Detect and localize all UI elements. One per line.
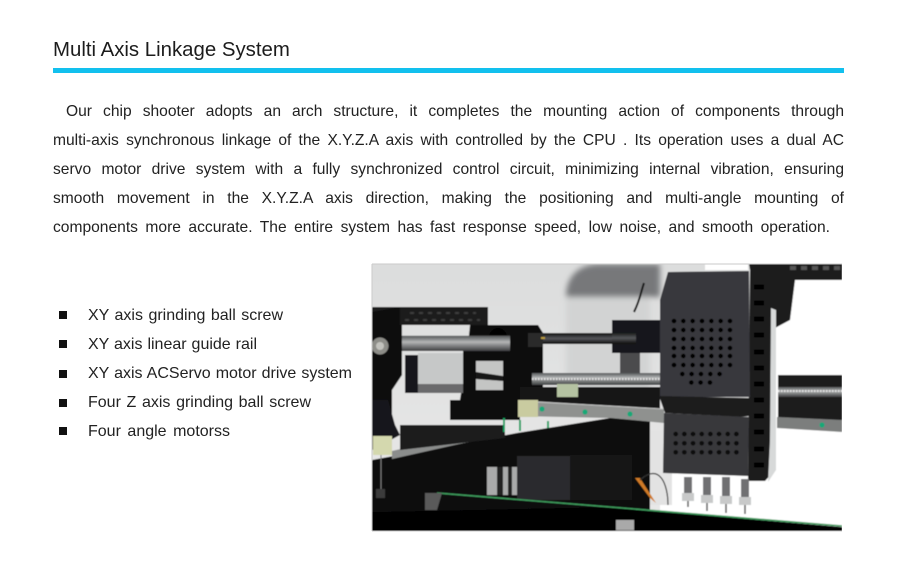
lower right machine window (660, 470, 672, 506)
lower green strip (372, 507, 842, 531)
feature list: XY axis ACServo motor drive system (88, 365, 352, 382)
black rod and end block (543, 333, 633, 344)
intro paragraph: components more accurate. The entire system has fast response speed, low noise, and smooth operation. (53, 219, 830, 236)
rear drag chain (372, 307, 488, 325)
intro paragraph: servo motor drive system with a fully synchronized control circuit, minimizing internal vibration, ensuring (53, 161, 844, 178)
linear guide rail (538, 400, 665, 424)
upper ball screw (402, 336, 510, 351)
intro paragraph: Our chip shooter adopts an arch structure, it completes the mounting action of components through (66, 103, 844, 120)
lower black frame (372, 417, 651, 513)
feature list (59, 307, 352, 440)
intro paragraph (53, 103, 844, 236)
rail green markers (539, 406, 825, 428)
black bracket (460, 325, 543, 400)
placement head (659, 271, 785, 514)
servo motor (405, 355, 418, 393)
intro paragraph: smooth movement in the X.Y.Z.A axis direction, making the positioning and multi-angle mounting of (53, 190, 844, 207)
feature list: Four angle motorss (88, 423, 230, 440)
machine photo: multi-axis gantry and placement head (372, 264, 842, 532)
intro paragraph: multi-axis synchronous linkage of the X.Y.Z.A axis with controlled by the CPU . Its operation uses a dual AC (53, 132, 844, 149)
photo background (372, 264, 751, 511)
feature list: XY axis grinding ball screw (88, 307, 283, 324)
clear rail blocks (518, 400, 538, 417)
bullet item: XY axis grinding ball screw (59, 307, 284, 324)
nozzles (682, 477, 751, 514)
lower ball screw (532, 373, 662, 385)
bullet item: Four angle motorss (59, 423, 230, 440)
title underline bar (53, 68, 844, 73)
bullet item: XY axis ACServo motor drive system (59, 365, 352, 382)
background shadow (566, 264, 660, 390)
bullet item: XY axis linear guide rail (59, 336, 257, 353)
bullet item: Four Z axis grinding ball screw (59, 394, 312, 411)
coupling (476, 361, 503, 390)
rear top chain right (749, 264, 842, 328)
head ventilation holes (674, 321, 732, 382)
left post with bearing (372, 324, 403, 414)
feature list: Four Z axis grinding ball screw (88, 394, 311, 411)
carriage under-rail (520, 387, 660, 412)
lower left rail (391, 442, 468, 460)
title: Multi Axis Linkage System (53, 39, 290, 61)
feature list: XY axis linear guide rail (88, 336, 257, 353)
head side slots (754, 287, 764, 465)
